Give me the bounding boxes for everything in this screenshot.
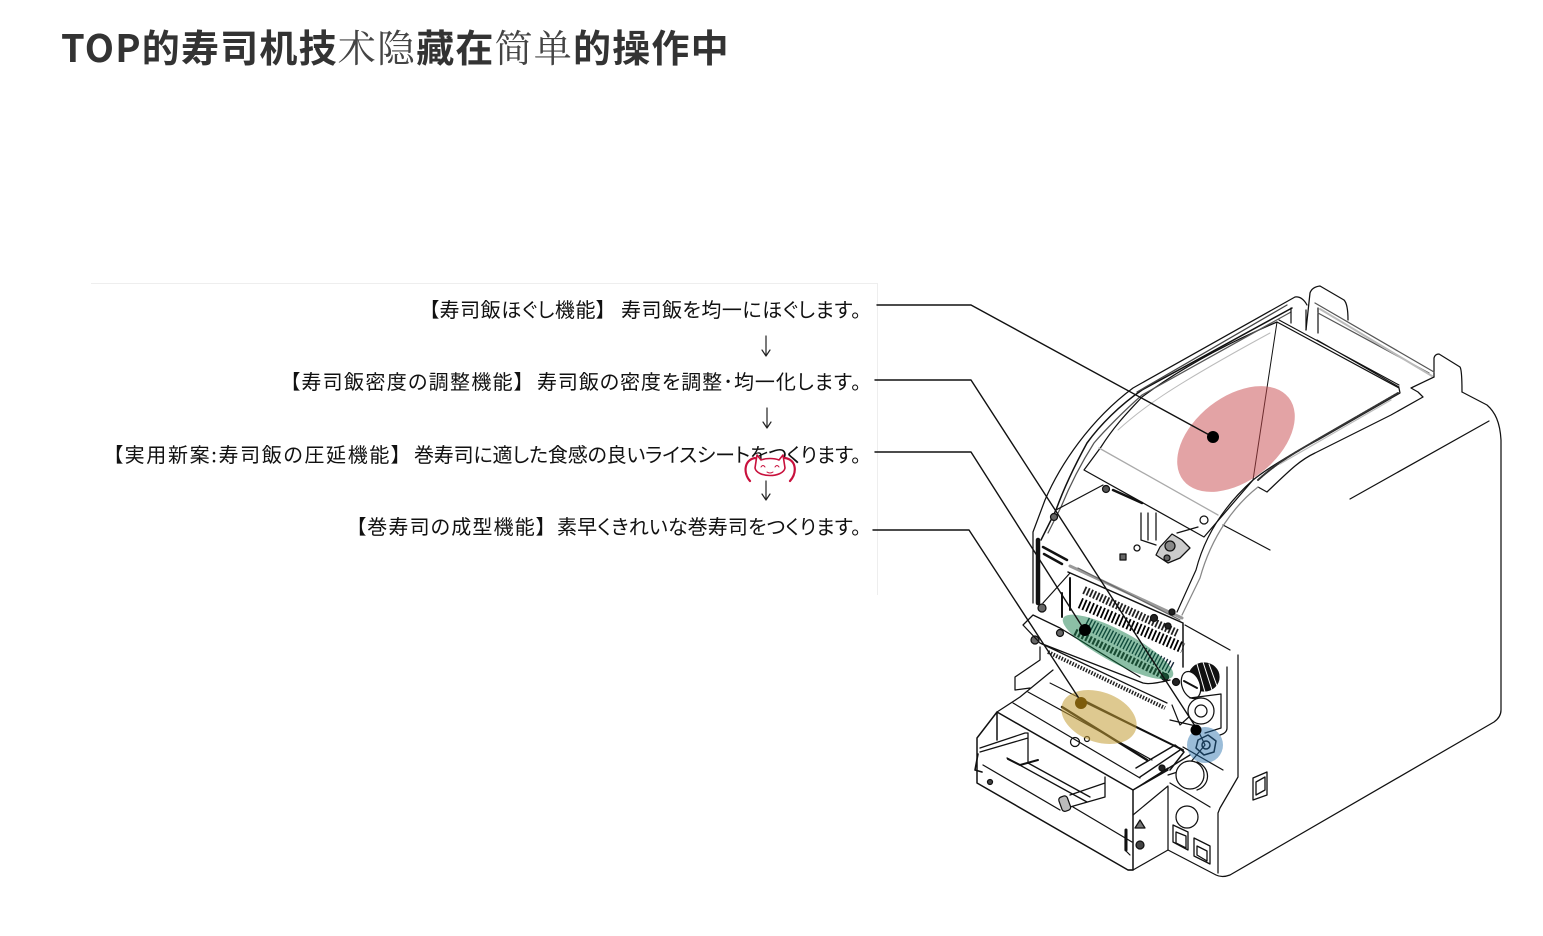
nut bbox=[1196, 735, 1216, 755]
text: rice rolling function: 巻寿司に適した食感の良いライスシートをつくります。 bbox=[414, 439, 861, 468]
round buttons bbox=[1176, 761, 1208, 828]
highlight: blue nut area bbox=[1187, 727, 1223, 763]
lower frame and rollers bbox=[997, 615, 1205, 790]
panel: function list bbox=[91, 283, 878, 595]
leader line 1 bbox=[877, 305, 1219, 443]
leader line 4 bbox=[873, 530, 1087, 709]
icon: red cat bbox=[746, 455, 795, 481]
highlight: green comb area bbox=[1056, 604, 1180, 690]
leader line 3 bbox=[875, 452, 1091, 636]
arrow: step 2 to 3 bbox=[763, 408, 771, 428]
machine body outline bbox=[1033, 286, 1501, 876]
machine illustration bbox=[975, 286, 1501, 876]
text: roll forming function: 素早くきれいな巻寿司をつくります。 bbox=[557, 511, 861, 540]
arrow: step 3 to 4 bbox=[762, 481, 770, 500]
text: rice density function: 【寿司飯密度の調整機能】 bbox=[290, 366, 524, 395]
arrow: step 1 to 2 bbox=[762, 336, 770, 356]
highlight: yellow roller area bbox=[1054, 680, 1144, 754]
text: rice loosening function bbox=[429, 294, 861, 323]
leader line 2 bbox=[875, 380, 1202, 736]
inner mechanism bbox=[1031, 485, 1208, 667]
text: rice rolling function bbox=[113, 439, 861, 468]
text: rice density function: 寿司飯の密度を調整･均一化します。 bbox=[537, 366, 861, 395]
text: roll forming function bbox=[356, 511, 861, 540]
control dial bbox=[1188, 694, 1221, 733]
text: rice loosening function: 【寿司飯ほぐし機能】 bbox=[429, 294, 606, 323]
tray bbox=[975, 712, 1168, 870]
text: rice loosening function: 寿司飯を均一にほぐします。 bbox=[621, 294, 861, 323]
control knob bbox=[1178, 662, 1219, 701]
highlight: red hopper area bbox=[1157, 365, 1315, 513]
text: rice rolling function: 【実用新案:寿司飯の圧延機能】 bbox=[113, 439, 401, 468]
title: TOP的寿司机技术隐藏在简单的操作中 bbox=[61, 18, 730, 73]
text: rice density function bbox=[290, 366, 861, 395]
text: roll forming function: 【巻寿司の成型機能】 bbox=[356, 511, 546, 540]
comb rollers bbox=[1075, 590, 1183, 678]
hopper window bbox=[1041, 303, 1434, 615]
rocker switches bbox=[1173, 772, 1267, 864]
